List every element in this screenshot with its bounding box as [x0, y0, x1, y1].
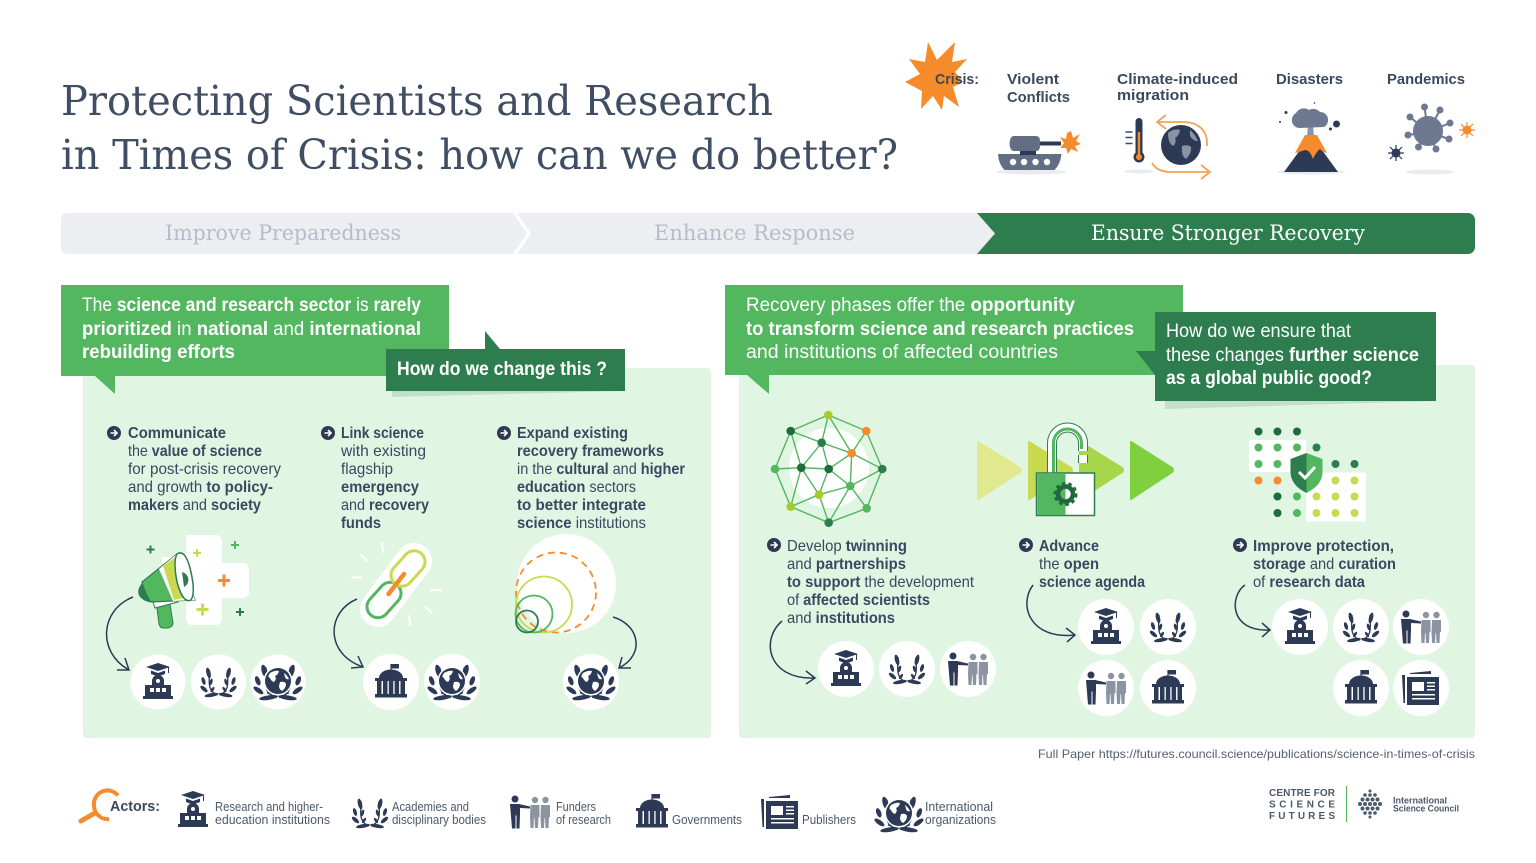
arrow	[613, 617, 636, 668]
stage: improve preparedness: Improve Preparedness	[165, 221, 401, 245]
callout: global public good: as a global public good?	[1166, 368, 1372, 389]
logo: centre for science futures	[1269, 788, 1336, 822]
column: expand recovery frameworks: recovery frameworks	[517, 443, 664, 460]
icon: network	[771, 411, 887, 527]
icon: chain link	[352, 543, 441, 625]
logo: centre for science futures: FUTURES	[1269, 811, 1335, 822]
stage: improve preparedness	[61, 213, 527, 254]
title: in Times of Crisis: how can we do better?	[61, 131, 898, 179]
crisis: climate-induced migration	[1117, 71, 1238, 179]
column: twinning and partnerships: of affected scientists	[787, 592, 930, 609]
actor: academies: disciplinary bodies	[392, 813, 486, 827]
arrow	[1235, 585, 1270, 637]
column: link science: flagship	[341, 461, 393, 478]
actors label: Actors:	[110, 798, 160, 815]
callout: rarely prioritized: rebuilding efforts	[82, 342, 235, 363]
callout: how do we change this: How do we change this ?	[397, 359, 607, 380]
process banner	[61, 213, 1475, 254]
stage: enhance response	[517, 213, 995, 254]
logos	[1269, 786, 1459, 822]
column: protect research data: storage and curation	[1253, 556, 1396, 573]
callout: how do we change this	[386, 331, 625, 397]
crisis: violent conflicts: Conflicts	[1007, 89, 1070, 106]
logo: international science council: Science Council	[1393, 804, 1459, 814]
left panel background	[83, 368, 711, 738]
actor: research institutions	[178, 791, 330, 827]
column: twinning and partnerships	[767, 411, 996, 697]
crisis: violent conflicts	[996, 71, 1081, 174]
crisis: climate-induced migration: migration	[1117, 87, 1189, 104]
right panel background	[739, 365, 1475, 738]
source link: Full Paper https://futures.council.science/publications/science-in-times-of-crisis	[1038, 747, 1475, 761]
callout: recovery opportunity	[725, 285, 1183, 394]
column: link science: with existing	[340, 443, 426, 460]
arrow	[1027, 585, 1075, 642]
callout: rarely prioritized	[61, 285, 449, 394]
actor: international organizations: organizations	[925, 813, 996, 827]
stage: ensure stronger recovery: Ensure Stronger Recovery	[1091, 221, 1365, 245]
crisis: climate-induced migration: Climate-induced	[1117, 71, 1238, 88]
logo: centre for science futures: CENTRE FOR	[1269, 788, 1336, 799]
crisis: pandemics: Pandemics	[1387, 71, 1465, 88]
column: expand recovery frameworks: Expand existing	[517, 425, 628, 442]
actor: international organizations	[873, 796, 996, 833]
actors	[1078, 599, 1196, 716]
icon: data grid with shield	[1249, 428, 1366, 522]
icon: crisis starburst	[905, 42, 967, 110]
column: expand recovery frameworks: to better integrate	[517, 497, 646, 514]
actor: international organizations: International	[925, 800, 993, 814]
actor: governments: Governments	[672, 813, 742, 827]
arrow	[770, 621, 815, 684]
column: open science agenda	[978, 428, 1196, 716]
callout: recovery opportunity: to transform science and research practices	[746, 319, 1134, 340]
column: protect research data	[1233, 428, 1449, 716]
stage: ensure stronger recovery	[977, 213, 1475, 254]
actors legend	[81, 790, 996, 833]
actors	[818, 641, 996, 697]
title: Protecting Scientists and Research	[61, 77, 773, 125]
stage: enhance response: Enhance Response	[654, 221, 855, 245]
crisis: disasters: Disasters	[1276, 71, 1343, 88]
actor: funders	[510, 796, 611, 828]
column: protect research data: of research data	[1253, 574, 1365, 591]
icon: magnifier	[81, 790, 118, 821]
column: communicate value of science	[107, 425, 306, 710]
column: communicate value of science: for post-crisis recovery	[128, 461, 281, 478]
crisis: pandemics	[1387, 71, 1475, 174]
arrow	[107, 597, 133, 670]
callout: global public good: How do we ensure that	[1166, 321, 1352, 342]
actor: research institutions: education institutions	[215, 813, 330, 827]
icon: open padlock with arrows	[978, 428, 1173, 516]
column: communicate value of science: and growth to policy-	[128, 479, 273, 496]
crisis: violent conflicts: Violent	[1007, 71, 1059, 88]
column: link science	[321, 425, 480, 710]
title	[61, 77, 898, 179]
column: link science: funds	[341, 515, 381, 532]
column: link science: and recovery	[341, 497, 429, 514]
crisis label: Crisis:	[935, 71, 979, 88]
actor: funders: of research	[556, 813, 611, 827]
column: expand recovery frameworks: education sectors	[517, 479, 636, 496]
column: twinning and partnerships: and institutions	[787, 610, 895, 627]
actor: governments	[636, 794, 742, 828]
column: communicate value of science: makers and society	[128, 497, 261, 514]
column: twinning and partnerships: and partnerships	[787, 556, 906, 573]
actors	[1272, 599, 1449, 716]
column: twinning and partnerships: Develop twinning	[787, 538, 907, 555]
crisis: disasters	[1276, 71, 1345, 174]
icon: megaphone	[138, 535, 249, 628]
icon: expanding circles	[516, 534, 616, 633]
actor: academies: Academies and	[392, 800, 469, 814]
column: protect research data: Improve protection,	[1253, 538, 1394, 555]
column: open science agenda: Advance	[1039, 538, 1099, 555]
actor: publishers: Publishers	[802, 813, 856, 827]
panel: right	[725, 285, 1475, 738]
column: link science: emergency	[341, 479, 419, 496]
arrow	[334, 599, 363, 668]
actors	[130, 654, 306, 710]
column: communicate value of science: Communicate	[128, 425, 226, 442]
actor: research institutions: Research and higher-	[215, 800, 323, 814]
actor: academies	[351, 798, 486, 829]
column: link science: Link science	[341, 425, 424, 442]
crisis legend	[905, 42, 1475, 179]
callout: rarely prioritized: prioritized in national and international	[82, 319, 421, 340]
logo: international science council: International	[1393, 796, 1447, 806]
callout: recovery opportunity: Recovery phases offer the opportunity	[746, 295, 1075, 316]
column: twinning and partnerships: to support the development	[787, 574, 975, 591]
column: expand recovery frameworks: science institutions	[517, 515, 646, 532]
actors	[363, 654, 480, 710]
column: expand recovery frameworks: in the cultural and higher	[517, 461, 685, 478]
callout: global public good	[1136, 312, 1436, 409]
actors	[563, 654, 619, 710]
logo: centre for science futures: SCIENCE	[1269, 800, 1335, 810]
column: open science agenda: science agenda	[1039, 574, 1145, 591]
actor: publishers	[761, 795, 856, 829]
callout: global public good: these changes further science	[1166, 345, 1419, 366]
logo: international science council	[1358, 790, 1459, 818]
callout: rarely prioritized: The science and research sector is rarely	[82, 295, 421, 316]
actor: funders: Funders	[556, 800, 596, 814]
panel: left	[61, 285, 711, 738]
column: communicate value of science: the value of science	[128, 443, 262, 460]
column: expand recovery frameworks	[497, 425, 685, 710]
callout: recovery opportunity: and institutions of affected countries	[746, 342, 1058, 363]
column: open science agenda: the open	[1039, 556, 1099, 573]
